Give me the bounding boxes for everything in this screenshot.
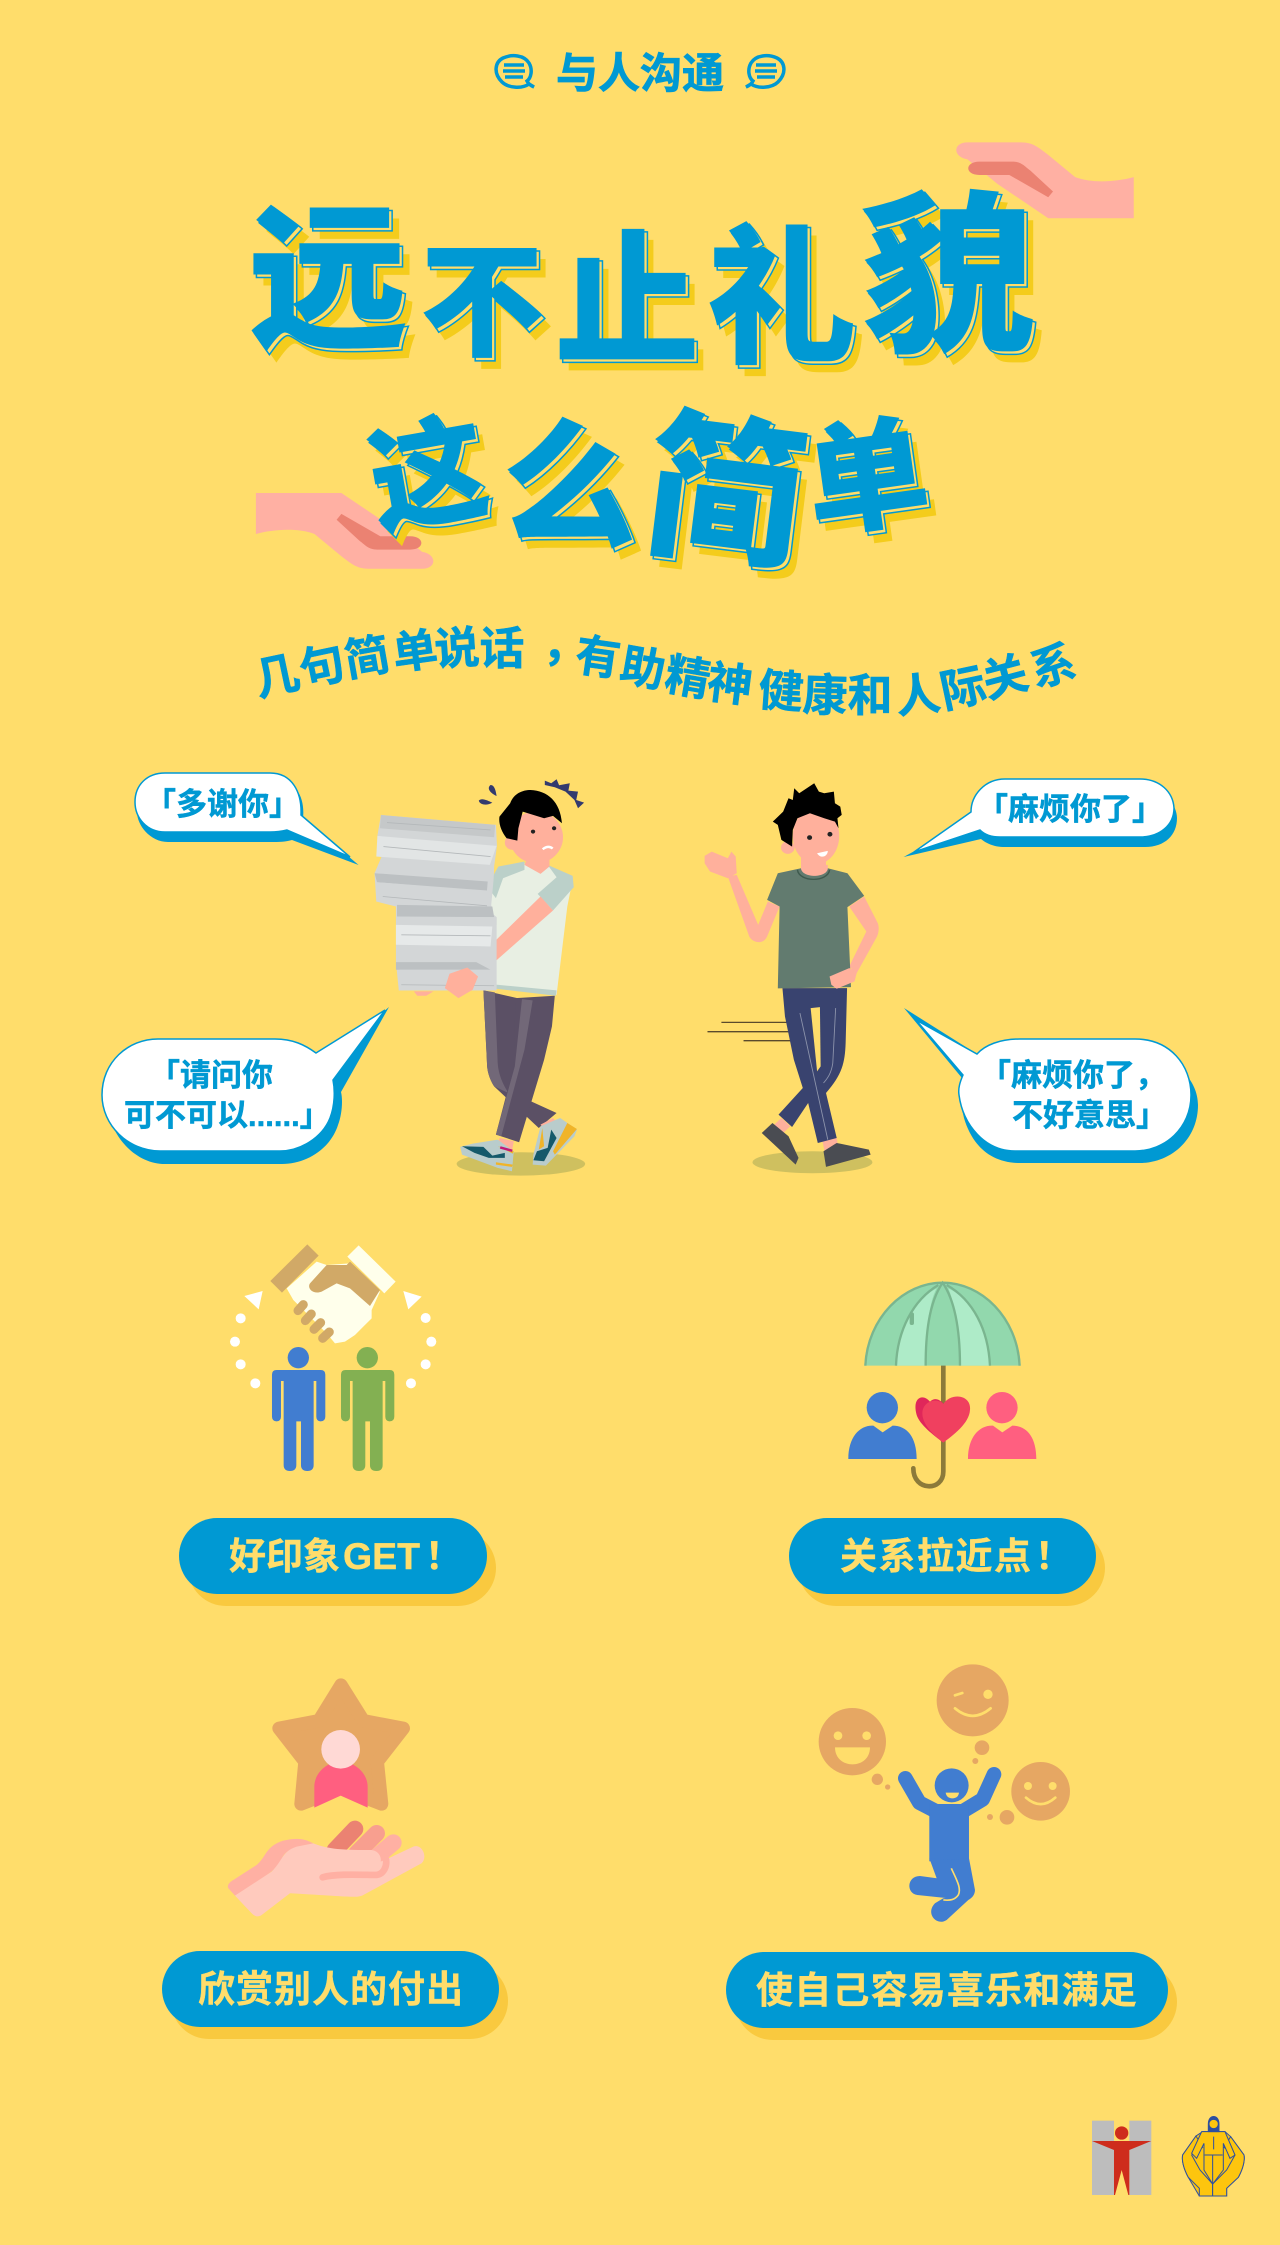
pill: 好印象GET: GET (343, 1536, 420, 1577)
title line 2: 单 (800, 406, 940, 557)
logo: red figure (1092, 2121, 1151, 2195)
face details (807, 832, 832, 857)
speech bubble: 请问你 可不可以: 可不可以......」 (124, 1098, 331, 1133)
neck (801, 853, 826, 872)
title line 2: 这 (359, 401, 499, 552)
title line 2: 这 (368, 412, 508, 563)
hair (773, 783, 842, 847)
cuffs (270, 1244, 319, 1293)
pill: 使自己容易喜乐和满足 (726, 1952, 1177, 2040)
title line 1: 不 (429, 246, 553, 384)
ankles (774, 1118, 838, 1153)
title line 1: 貌 (861, 180, 1035, 375)
icon: left chat bubble (496, 56, 534, 87)
title line 1: 貌 (870, 191, 1044, 386)
canopy (864, 1282, 1021, 1366)
shoes (460, 1118, 577, 1171)
person in star (314, 1762, 368, 1808)
face details (531, 826, 556, 849)
thumb crease (323, 1859, 386, 1877)
title line 2: 简 (644, 406, 825, 603)
pill: 好印象GET: ！ (425, 1536, 462, 1577)
subtitle on a wave: 几句简单说话，有助精神健康和人际关系 (250, 619, 1081, 723)
speech bubble: 请问你 可不可以: 「请问你 (149, 1058, 273, 1093)
smiley top (937, 1664, 1009, 1764)
title line 1: 远 (258, 202, 418, 381)
figure: man carrying a stack of papers (375, 779, 585, 1176)
hand front (235, 1843, 424, 1916)
t-shirt (491, 863, 573, 995)
dots and arrows (230, 1291, 436, 1388)
ground shadow (457, 1152, 585, 1176)
paper stack (375, 815, 497, 990)
title line 2 (359, 395, 946, 603)
icon: bottom hand (256, 493, 433, 569)
header text: 与人沟通 (556, 50, 724, 97)
title line 2: 么 (499, 409, 647, 573)
logo: hands holding person (1182, 2116, 1244, 2196)
smiley left (819, 1708, 890, 1790)
icon: umbrella with two people and heart (848, 1282, 1036, 1486)
cream hand (287, 1262, 380, 1343)
hand back (228, 1839, 313, 1896)
title line 1: 礼 (706, 215, 856, 383)
title line 1: 貌 (864, 183, 1038, 378)
icon: right chat bubble (746, 56, 784, 87)
speech bubble: 麻烦你了 不好意思 (904, 1008, 1198, 1163)
pill: 关系拉近点 (789, 1518, 1105, 1606)
pill: 好印象GET: 好印象 (229, 1536, 340, 1577)
speech bubble: 请问你 可不可以 (102, 1007, 389, 1164)
title line 1: 不 (420, 235, 544, 373)
shoes (762, 1123, 871, 1167)
speech bubble: 麻烦你了: 「麻烦你了」 (977, 792, 1163, 827)
head (509, 811, 563, 863)
motion lines (707, 1022, 803, 1041)
smiley right (987, 1762, 1070, 1825)
title line 2: 单 (806, 414, 946, 565)
title line 1: 远 (248, 191, 408, 370)
title line 1: 远 (251, 194, 411, 373)
collar (801, 865, 828, 876)
pill: 欣赏别人的付出 (162, 1951, 508, 2039)
icon: top hand (956, 142, 1134, 218)
arms and hands (705, 852, 879, 974)
neck (524, 857, 549, 874)
trousers (483, 990, 557, 1142)
heart (915, 1397, 943, 1443)
icon: handshake and two people (230, 1244, 436, 1471)
head (793, 808, 839, 864)
title line 1: 止 (558, 225, 702, 387)
stress mark (545, 779, 584, 808)
title line 2: 这 (362, 404, 502, 555)
fingers (335, 1829, 355, 1850)
fingers (298, 1305, 329, 1338)
handle (913, 1366, 943, 1486)
title line 2: 单 (797, 403, 937, 554)
figure: man walking and waving (705, 783, 879, 1173)
hair (499, 790, 562, 841)
title line 2: 么 (496, 406, 644, 570)
jumping person (905, 1768, 994, 1922)
pill: 欣赏别人的付出: 欣赏别人的付出 (198, 1969, 464, 2010)
speech bubble: 多谢你 (135, 773, 359, 865)
sweat drops (479, 785, 497, 805)
hand on hip (830, 968, 857, 989)
header: topic label (496, 50, 784, 97)
title line 1 (248, 180, 1044, 395)
title line 1: 礼 (715, 226, 865, 394)
title line 1: 止 (564, 233, 708, 395)
arm (467, 897, 553, 976)
title line 1: 礼 (709, 218, 859, 386)
blue person (272, 1347, 325, 1471)
t-shirt (767, 868, 864, 988)
pink person (968, 1392, 1036, 1459)
title line 2: 么 (505, 417, 653, 581)
ankles (498, 1118, 558, 1151)
hands (414, 967, 478, 998)
pill: 使自己容易喜乐和满足: 使自己容易喜乐和满足 (756, 1970, 1138, 2011)
pill: 关系拉近点: ！ (1035, 1536, 1072, 1577)
speech bubble: 麻烦你了 (904, 779, 1177, 857)
green person (341, 1347, 394, 1471)
jeans (779, 988, 847, 1143)
icon: joyful person with smiley faces (819, 1664, 1070, 1922)
speech bubble: 麻烦你了 不好意思: 不好意思」 (1012, 1098, 1167, 1133)
speech bubble: 多谢你: 「多谢你」 (145, 787, 300, 822)
speech bubble: 麻烦你了 不好意思: 「麻烦你了， (980, 1058, 1166, 1093)
title line 2: 简 (635, 395, 816, 592)
sleeves (487, 862, 574, 911)
title line 1: 不 (423, 238, 547, 376)
ground shadow (752, 1151, 872, 1173)
pill: 好印象GET (179, 1518, 496, 1606)
icon: hand holding star (228, 1685, 424, 1916)
title line 2: 简 (638, 398, 819, 595)
brown hand (309, 1262, 380, 1306)
pill: 关系拉近点: 关系拉近点 (840, 1536, 1032, 1577)
blue person (848, 1392, 917, 1459)
star (279, 1685, 403, 1804)
title line 1: 止 (554, 222, 700, 384)
